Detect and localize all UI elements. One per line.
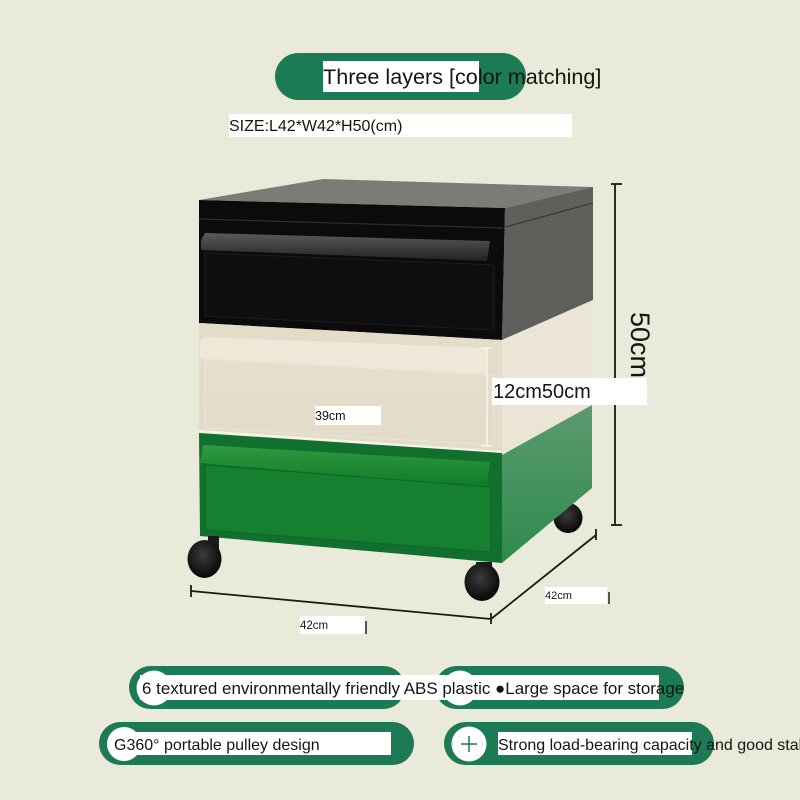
feature pill: pulley: G360° portable pulley design [114,737,320,754]
product: three layer drawer cabinet [188,179,593,601]
size line [229,114,572,137]
length label [300,616,366,634]
black drawer layer [199,179,593,340]
size line: SIZE:L42*W42*H50(cm) [229,118,402,135]
feature pill: storage [435,666,684,709]
front left wheel [188,536,222,578]
drawer height marker [481,348,492,447]
feature pill: ABS plastic [129,666,405,709]
depth label [545,587,609,604]
feature pill: load bearing [444,722,800,765]
drawer dimensions label: 12cm50cm [493,381,591,403]
front right wheel [464,562,500,601]
length label: 42cm [300,620,328,632]
green drawer layer [199,405,592,563]
length dimension line [191,585,491,624]
drawer width label: 39cm [315,409,346,423]
drawer dimensions label [492,378,647,405]
title pill [275,53,601,100]
drawer width label [315,406,381,425]
feature pill: pulley [99,722,414,765]
cream drawer layer [199,300,593,453]
height dimension line [611,184,622,525]
depth label: 42cm [545,590,572,602]
rotated height label: 50cm [625,312,655,378]
depth dimension line [491,529,596,619]
back wheel [554,503,582,533]
title pill: Three layers [color matching] [323,64,601,89]
feature text row one: 6 textured environmentally friendly ABS plastic ●Large space for storage [142,679,684,698]
